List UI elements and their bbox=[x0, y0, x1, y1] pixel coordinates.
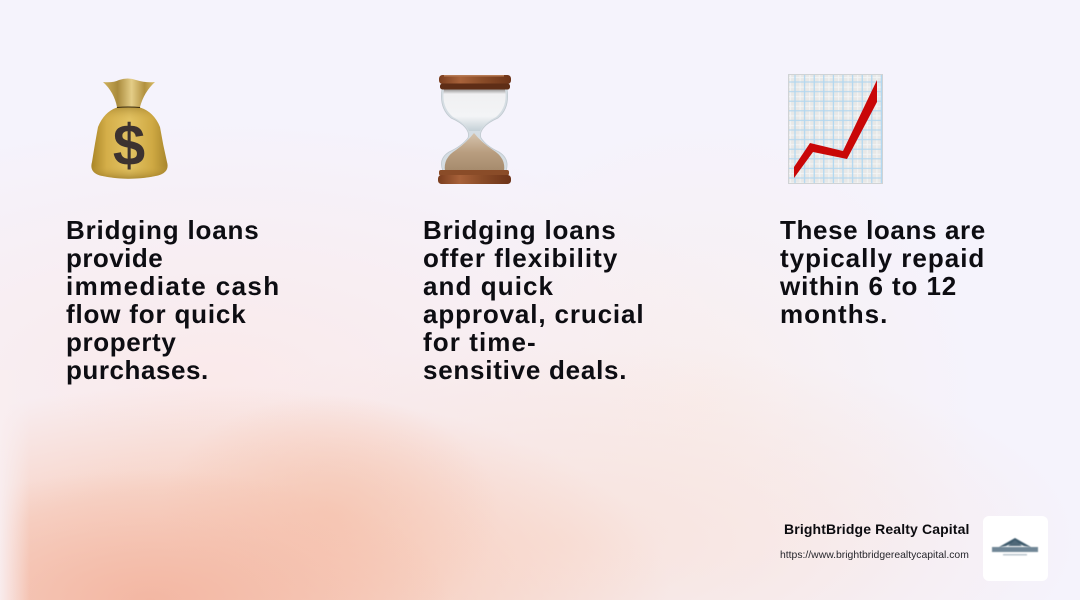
text: column 3 bbox=[780, 215, 986, 329]
website url: https://www.brightbridgerealtycapital.com bbox=[780, 550, 969, 561]
logo card bbox=[983, 516, 1048, 581]
icon: rising chart bbox=[788, 74, 883, 184]
text: column 3: These loans are bbox=[780, 215, 986, 245]
text: column 1 bbox=[66, 215, 281, 385]
icon: money bag: $ bbox=[113, 113, 145, 178]
text: column 2: and quick bbox=[423, 271, 554, 301]
text: column 2 bbox=[423, 215, 644, 385]
icon: money bag bbox=[91, 78, 168, 179]
text: column 1: Bridging loans bbox=[66, 215, 259, 245]
text: column 2: for time- bbox=[423, 327, 537, 357]
text: column 1: property bbox=[66, 327, 176, 357]
text: column 2: approval, crucial bbox=[423, 299, 644, 329]
text: column 2: sensitive deals. bbox=[423, 355, 627, 385]
icon: logo bbox=[991, 537, 1039, 556]
text: column 1: provide bbox=[66, 243, 163, 273]
brand name: BrightBridge Realty Capital bbox=[784, 521, 970, 537]
text: column 3: months. bbox=[780, 299, 888, 329]
text: column 3: typically repaid bbox=[780, 243, 985, 273]
text: column 1: immediate cash bbox=[66, 271, 281, 301]
icon: hourglass bbox=[438, 75, 511, 184]
text: column 1: purchases. bbox=[66, 355, 209, 385]
text: column 1: flow for quick bbox=[66, 299, 246, 329]
text: column 3: within 6 to 12 bbox=[780, 271, 957, 301]
text: column 2: Bridging loans bbox=[423, 215, 616, 245]
text: column 2: offer flexibility bbox=[423, 243, 618, 273]
